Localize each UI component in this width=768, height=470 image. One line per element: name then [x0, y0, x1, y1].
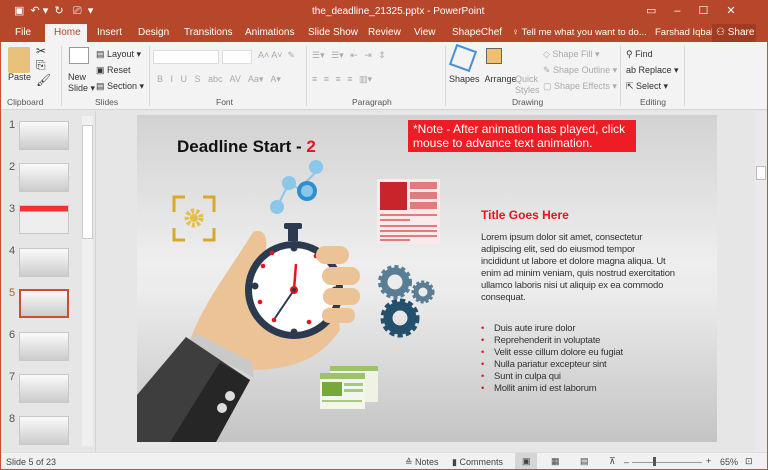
- ribbon: B I U S abc AV Aa▾ A▾: [157, 74, 281, 84]
- text: paragraph: adipiscing elit, sed do eiusmod tempor: [481, 244, 635, 255]
- ribbon: ✎ Shape Outline ▾: [543, 65, 617, 75]
- tabs: Transitions: [184, 27, 233, 38]
- status bar: Slide 5 of 23: [6, 457, 56, 467]
- ribbon: 🖌: [36, 73, 51, 87]
- thumbnail panel: 6: [9, 329, 15, 341]
- text: bullet list: [481, 323, 624, 394]
- right scrollbar: [755, 111, 767, 452]
- tabs: Animations: [245, 27, 294, 38]
- ribbon: ▣ Reset: [96, 65, 131, 75]
- status bar: ▮ Comments: [452, 457, 503, 467]
- text: bullet list: •: [481, 335, 484, 346]
- thumbnail panel: 5: [9, 287, 15, 299]
- ribbon: ◇ Shape Fill ▾: [543, 49, 599, 59]
- ribbon: [0, 42, 768, 110]
- tabs: ShapeChef: [452, 27, 502, 38]
- tabs: Review: [368, 27, 401, 38]
- ribbon: ⇱ Select ▾: [626, 81, 668, 91]
- text: paragraph: consequat.: [481, 292, 525, 303]
- ribbon: Quick: [515, 74, 538, 84]
- tabs: [15, 24, 756, 42]
- icon: gears: [380, 267, 433, 335]
- status bar: +: [706, 456, 711, 466]
- ribbon: Paragraph: [352, 97, 392, 107]
- text: bullet list: Mollit anim id est laborum: [494, 383, 597, 394]
- ribbon: ☰▾ ☰▾ ⇤ ⇥ ⇕: [312, 50, 386, 60]
- text: bullet list: Sunt in culpa qui: [494, 371, 561, 382]
- status bar: –: [624, 457, 629, 467]
- ribbon: Font: [216, 97, 233, 107]
- tabs: Farshad Iqbal: [655, 27, 713, 38]
- illustration: hand with stopwatch: [137, 223, 360, 442]
- window title: the_deadline_21325.pptx - PowerPoint: [312, 6, 484, 17]
- window controls: ▭–☐✕: [646, 5, 754, 17]
- status bar: [0, 452, 768, 470]
- ribbon: ⎘: [36, 58, 46, 72]
- text: bullet list: •: [481, 371, 484, 382]
- text: heading: Title Goes Here: [481, 208, 569, 222]
- status bar: ≙ Notes: [405, 457, 439, 467]
- ribbon: Paste: [8, 72, 31, 82]
- ribbon: ≡ ≡ ≡ ≡ ▥▾: [312, 74, 372, 84]
- tabs: File: [15, 27, 31, 38]
- thumbnail panel: 8: [9, 413, 15, 425]
- title bar: [0, 0, 768, 42]
- icon: molecule: [270, 160, 323, 214]
- thumbnail panel: [0, 111, 96, 452]
- ribbon: Slides: [95, 97, 118, 107]
- ribbon: Shapes Arrange: [449, 74, 517, 84]
- tabs: Insert: [97, 27, 122, 38]
- text: bullet list: •: [481, 323, 484, 334]
- ribbon: Editing: [640, 97, 666, 107]
- ribbon: Styles: [515, 85, 540, 95]
- tabs: View: [414, 27, 436, 38]
- text: bullet list: Reprehenderit in voluptate: [494, 335, 600, 346]
- thumbnail panel: 3: [9, 203, 15, 215]
- text: bullet list: •: [481, 347, 484, 358]
- thumbnail panel: 2: [9, 161, 15, 173]
- ribbon: Drawing: [512, 97, 543, 107]
- tabs: Slide Show: [308, 27, 358, 38]
- text: paragraph: Lorem ipsum dolor sit amet, consectetur: [481, 232, 642, 243]
- icon: document: [377, 179, 440, 244]
- text: paragraph: ullamco laboris nisi ut aliquip ex ea commodo: [481, 280, 663, 291]
- tabs: Home: [54, 27, 81, 38]
- text: paragraph: [481, 232, 675, 303]
- slide: [137, 115, 717, 442]
- ribbon: New: [68, 72, 86, 82]
- illustration: [137, 160, 440, 442]
- tabs: ⚇ Share: [716, 27, 754, 38]
- text: bullet list: Velit esse cillum dolore eu fugiat: [494, 347, 623, 358]
- icon: gear frame: [174, 197, 214, 240]
- ribbon: ▢ Shape Effects ▾: [543, 81, 617, 91]
- icon: browser windows: [320, 366, 378, 409]
- ribbon: ▤ Layout ▾: [96, 49, 141, 59]
- ribbon: ab Replace ▾: [626, 65, 679, 75]
- ribbon: ⚲ Find: [626, 49, 653, 59]
- text: paragraph: enim ad minim veniam, quis nostrud exercitation: [481, 268, 675, 279]
- ribbon: Clipboard: [7, 97, 43, 107]
- text: bullet list: Nulla pariatur excepteur sint: [494, 359, 606, 370]
- thumbnail panel: 4: [9, 245, 15, 257]
- status bar: 65%: [720, 457, 738, 467]
- status bar: ▣ ▦ ▤ ⊼: [522, 456, 616, 466]
- tabs: ♀ Tell me what you want to do...: [512, 27, 647, 38]
- text: bullet list: •: [481, 359, 484, 370]
- quick access icons: ▣ ↶ ▾ ↻ ⎚ ▾: [14, 5, 93, 17]
- text: bullet list: Duis aute irure dolor: [494, 323, 575, 334]
- ribbon: ✂: [36, 44, 46, 58]
- ribbon: ▤ Section ▾: [96, 81, 144, 91]
- status bar: ⊡: [745, 456, 753, 466]
- slide title: Deadline Start - 2: [177, 137, 316, 156]
- text: bullet list: •: [481, 383, 484, 394]
- ribbon: Slide ▾: [68, 83, 95, 93]
- thumbnail panel: 1: [9, 119, 15, 131]
- text: paragraph: incididunt ut labore et dolore magna aliqua. Ut: [481, 256, 665, 267]
- ribbon: A˄ A˅ ✎: [258, 50, 295, 60]
- tabs: Design: [138, 27, 169, 38]
- note box: *Note - After animation has played, click mouse to advance text animation.: [413, 122, 625, 150]
- thumbnail panel: 7: [9, 371, 15, 383]
